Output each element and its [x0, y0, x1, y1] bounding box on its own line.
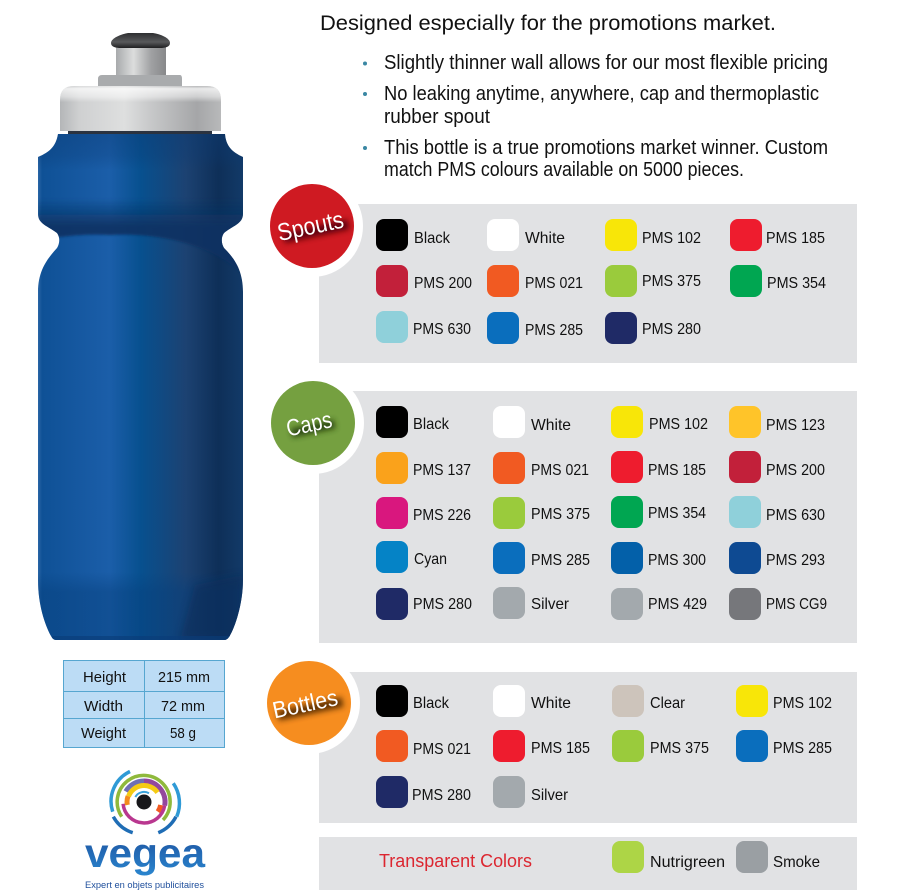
- table: dimensions: [64, 660, 224, 748]
- bullet 1: Slightly thinner wall allows for our most flexible pricing: [384, 52, 828, 74]
- swatch: PMS 021: PMS 021: [413, 741, 471, 758]
- table: dimensions: Height: [83, 670, 126, 686]
- bullet list: [363, 52, 828, 181]
- swatch: Black: [376, 685, 450, 717]
- swatch: PMS 185: [730, 219, 825, 251]
- swatch: PMS 375: PMS 375: [531, 506, 590, 523]
- swatch: Clear: Clear: [650, 695, 686, 712]
- swatch: PMS 285: PMS 285: [773, 740, 832, 757]
- swatch: PMS 630: PMS 630: [413, 321, 471, 338]
- swatch: Cyan: Cyan: [414, 551, 447, 568]
- swatch: PMS 102: PMS 102: [642, 230, 701, 247]
- swatch: PMS 021: [376, 730, 471, 762]
- swatch: PMS 102: PMS 102: [649, 416, 708, 433]
- swatch: White: [487, 219, 565, 251]
- swatch: PMS 200: [376, 265, 472, 297]
- badge: bottles: [267, 661, 351, 745]
- swatch: White: White: [531, 695, 571, 712]
- swatch: PMS 293: [729, 542, 825, 574]
- table: dimensions: Weight: [81, 726, 126, 742]
- swatch: PMS 021: PMS 021: [525, 275, 583, 292]
- swatch: PMS 123: [729, 406, 825, 438]
- swatch: PMS 375: [612, 730, 709, 762]
- bottle cap: [60, 86, 221, 131]
- badge: caps: [271, 381, 355, 465]
- swatch: PMS 200: [729, 451, 825, 483]
- swatch: PMS 185: PMS 185: [766, 230, 825, 247]
- swatch: Cyan: [376, 541, 447, 573]
- bullet 2: rubber spout: [384, 106, 490, 128]
- swatch: PMS 293: PMS 293: [766, 552, 825, 569]
- swatch: PMS 429: PMS 429: [648, 596, 707, 613]
- swatch: PMS 185: PMS 185: [648, 462, 706, 479]
- swatch: PMS 354: [730, 265, 826, 297]
- badge: spouts: Spouts: [275, 207, 346, 247]
- bullet 2: No leaking anytime, anywhere, cap and thermoplastic: [384, 83, 819, 105]
- badge: spouts: [270, 184, 354, 268]
- swatch: PMS 280: PMS 280: [412, 787, 471, 804]
- swatch: PMS 137: PMS 137: [413, 462, 471, 479]
- panel: bottles: [258, 652, 857, 823]
- swatch: Clear: [612, 685, 686, 717]
- swatch: Silver: Silver: [531, 596, 570, 613]
- swatch: White: White: [525, 230, 565, 247]
- swatch: Smoke: Smoke: [773, 854, 820, 871]
- swatch: Nutrigreen: [612, 841, 725, 873]
- swatch: PMS 285: PMS 285: [525, 322, 583, 339]
- table: dimensions: 72 mm: [161, 699, 205, 715]
- panel: caps: [262, 372, 857, 643]
- swatch: PMS 280: [605, 312, 701, 344]
- swatch: PMS 226: [376, 497, 471, 529]
- bullet 2: [363, 83, 819, 128]
- swatch: White: [493, 406, 571, 438]
- swatch: PMS 280: PMS 280: [413, 596, 472, 613]
- badge: caps: Caps: [284, 406, 334, 441]
- swatch: PMS 630: [729, 496, 825, 528]
- icon: eye rings: [111, 772, 179, 833]
- table: dimensions: Width: [84, 699, 123, 715]
- swatch: PMS 280: [376, 588, 472, 620]
- swatch: PMS 102: [611, 406, 708, 438]
- swatch: Smoke: [736, 841, 820, 873]
- swatch: PMS 354: PMS 354: [648, 505, 706, 522]
- swatch: PMS 226: PMS 226: [413, 507, 471, 524]
- swatch: PMS 280: PMS 280: [642, 321, 701, 338]
- swatch: PMS 285: [736, 730, 832, 762]
- swatch: White: [493, 685, 571, 717]
- swatch: PMS CG9: PMS CG9: [766, 596, 827, 613]
- swatch: PMS 300: PMS 300: [648, 552, 706, 569]
- bottle body: [38, 134, 243, 640]
- swatch: PMS 354: PMS 354: [767, 275, 826, 292]
- spout knob: [111, 33, 170, 48]
- swatch: PMS 375: [605, 265, 701, 297]
- swatch: PMS 185: [611, 451, 706, 483]
- panel: spouts: [261, 175, 857, 363]
- bullet 3: match PMS colours available on 5000 pieces.: [384, 159, 744, 181]
- panel: transparent colors: [319, 837, 857, 890]
- heading: transparent colors: Transparent Colors: [379, 851, 532, 871]
- spout stem: [116, 46, 166, 75]
- swatch: PMS 021: PMS 021: [531, 462, 589, 479]
- swatch: Black: Black: [413, 695, 450, 712]
- icon: sports bottle: [38, 33, 243, 640]
- swatch: PMS 021: [487, 265, 583, 297]
- swatch: PMS 630: [376, 311, 471, 343]
- swatch: PMS 280: [376, 776, 471, 808]
- swatch: Silver: Silver: [531, 787, 569, 804]
- swatch: PMS 375: PMS 375: [650, 740, 709, 757]
- swatch: PMS 102: [736, 685, 832, 717]
- swatch: PMS 102: [605, 219, 701, 251]
- swatch: PMS 375: PMS 375: [642, 273, 701, 290]
- swatch: PMS 375: [493, 497, 590, 529]
- swatch: PMS 123: PMS 123: [766, 417, 825, 434]
- table: dimensions: 215 mm: [158, 670, 210, 686]
- swatch: White: White: [531, 417, 571, 434]
- swatch: Black: [376, 219, 451, 251]
- heading: Designed especially for the promotions market.: [320, 12, 776, 35]
- swatch: PMS 429: [611, 588, 707, 620]
- swatch: Black: Black: [413, 416, 450, 433]
- swatch: Silver: [493, 776, 569, 808]
- swatch: PMS 021: [493, 452, 589, 484]
- swatch: PMS 137: [376, 452, 471, 484]
- swatch: Black: [376, 406, 450, 438]
- swatch: Silver: [493, 587, 570, 619]
- swatch: PMS 102: PMS 102: [773, 695, 832, 712]
- swatch: PMS 185: PMS 185: [531, 740, 590, 757]
- swatch: PMS 300: [611, 542, 706, 574]
- table: dimensions: 58 g: [170, 726, 196, 742]
- swatch: PMS 185: [493, 730, 590, 762]
- swatch: PMS 354: [611, 496, 706, 528]
- cap collar: [98, 75, 182, 86]
- swatch: PMS 285: [493, 542, 590, 574]
- bullet 3: [363, 137, 828, 181]
- swatch: PMS 200: PMS 200: [414, 275, 472, 292]
- logo: vegea: [85, 772, 206, 890]
- swatch: PMS 200: PMS 200: [766, 462, 825, 479]
- dark neck line: [68, 131, 212, 134]
- swatch: PMS CG9: [729, 588, 827, 620]
- swatch: PMS 630: PMS 630: [766, 507, 825, 524]
- swatch: Nutrigreen: Nutrigreen: [650, 854, 725, 871]
- bullet 3: This bottle is a true promotions market winner. Custom: [384, 137, 828, 159]
- badge: bottles: Bottles: [270, 684, 340, 723]
- swatch: PMS 285: PMS 285: [531, 552, 590, 569]
- swatch: Black: Black: [414, 230, 451, 247]
- swatch: PMS 285: [487, 312, 583, 344]
- tagline: Expert en objets publicitaires: [85, 880, 205, 890]
- wordmark: vegea: [85, 830, 206, 876]
